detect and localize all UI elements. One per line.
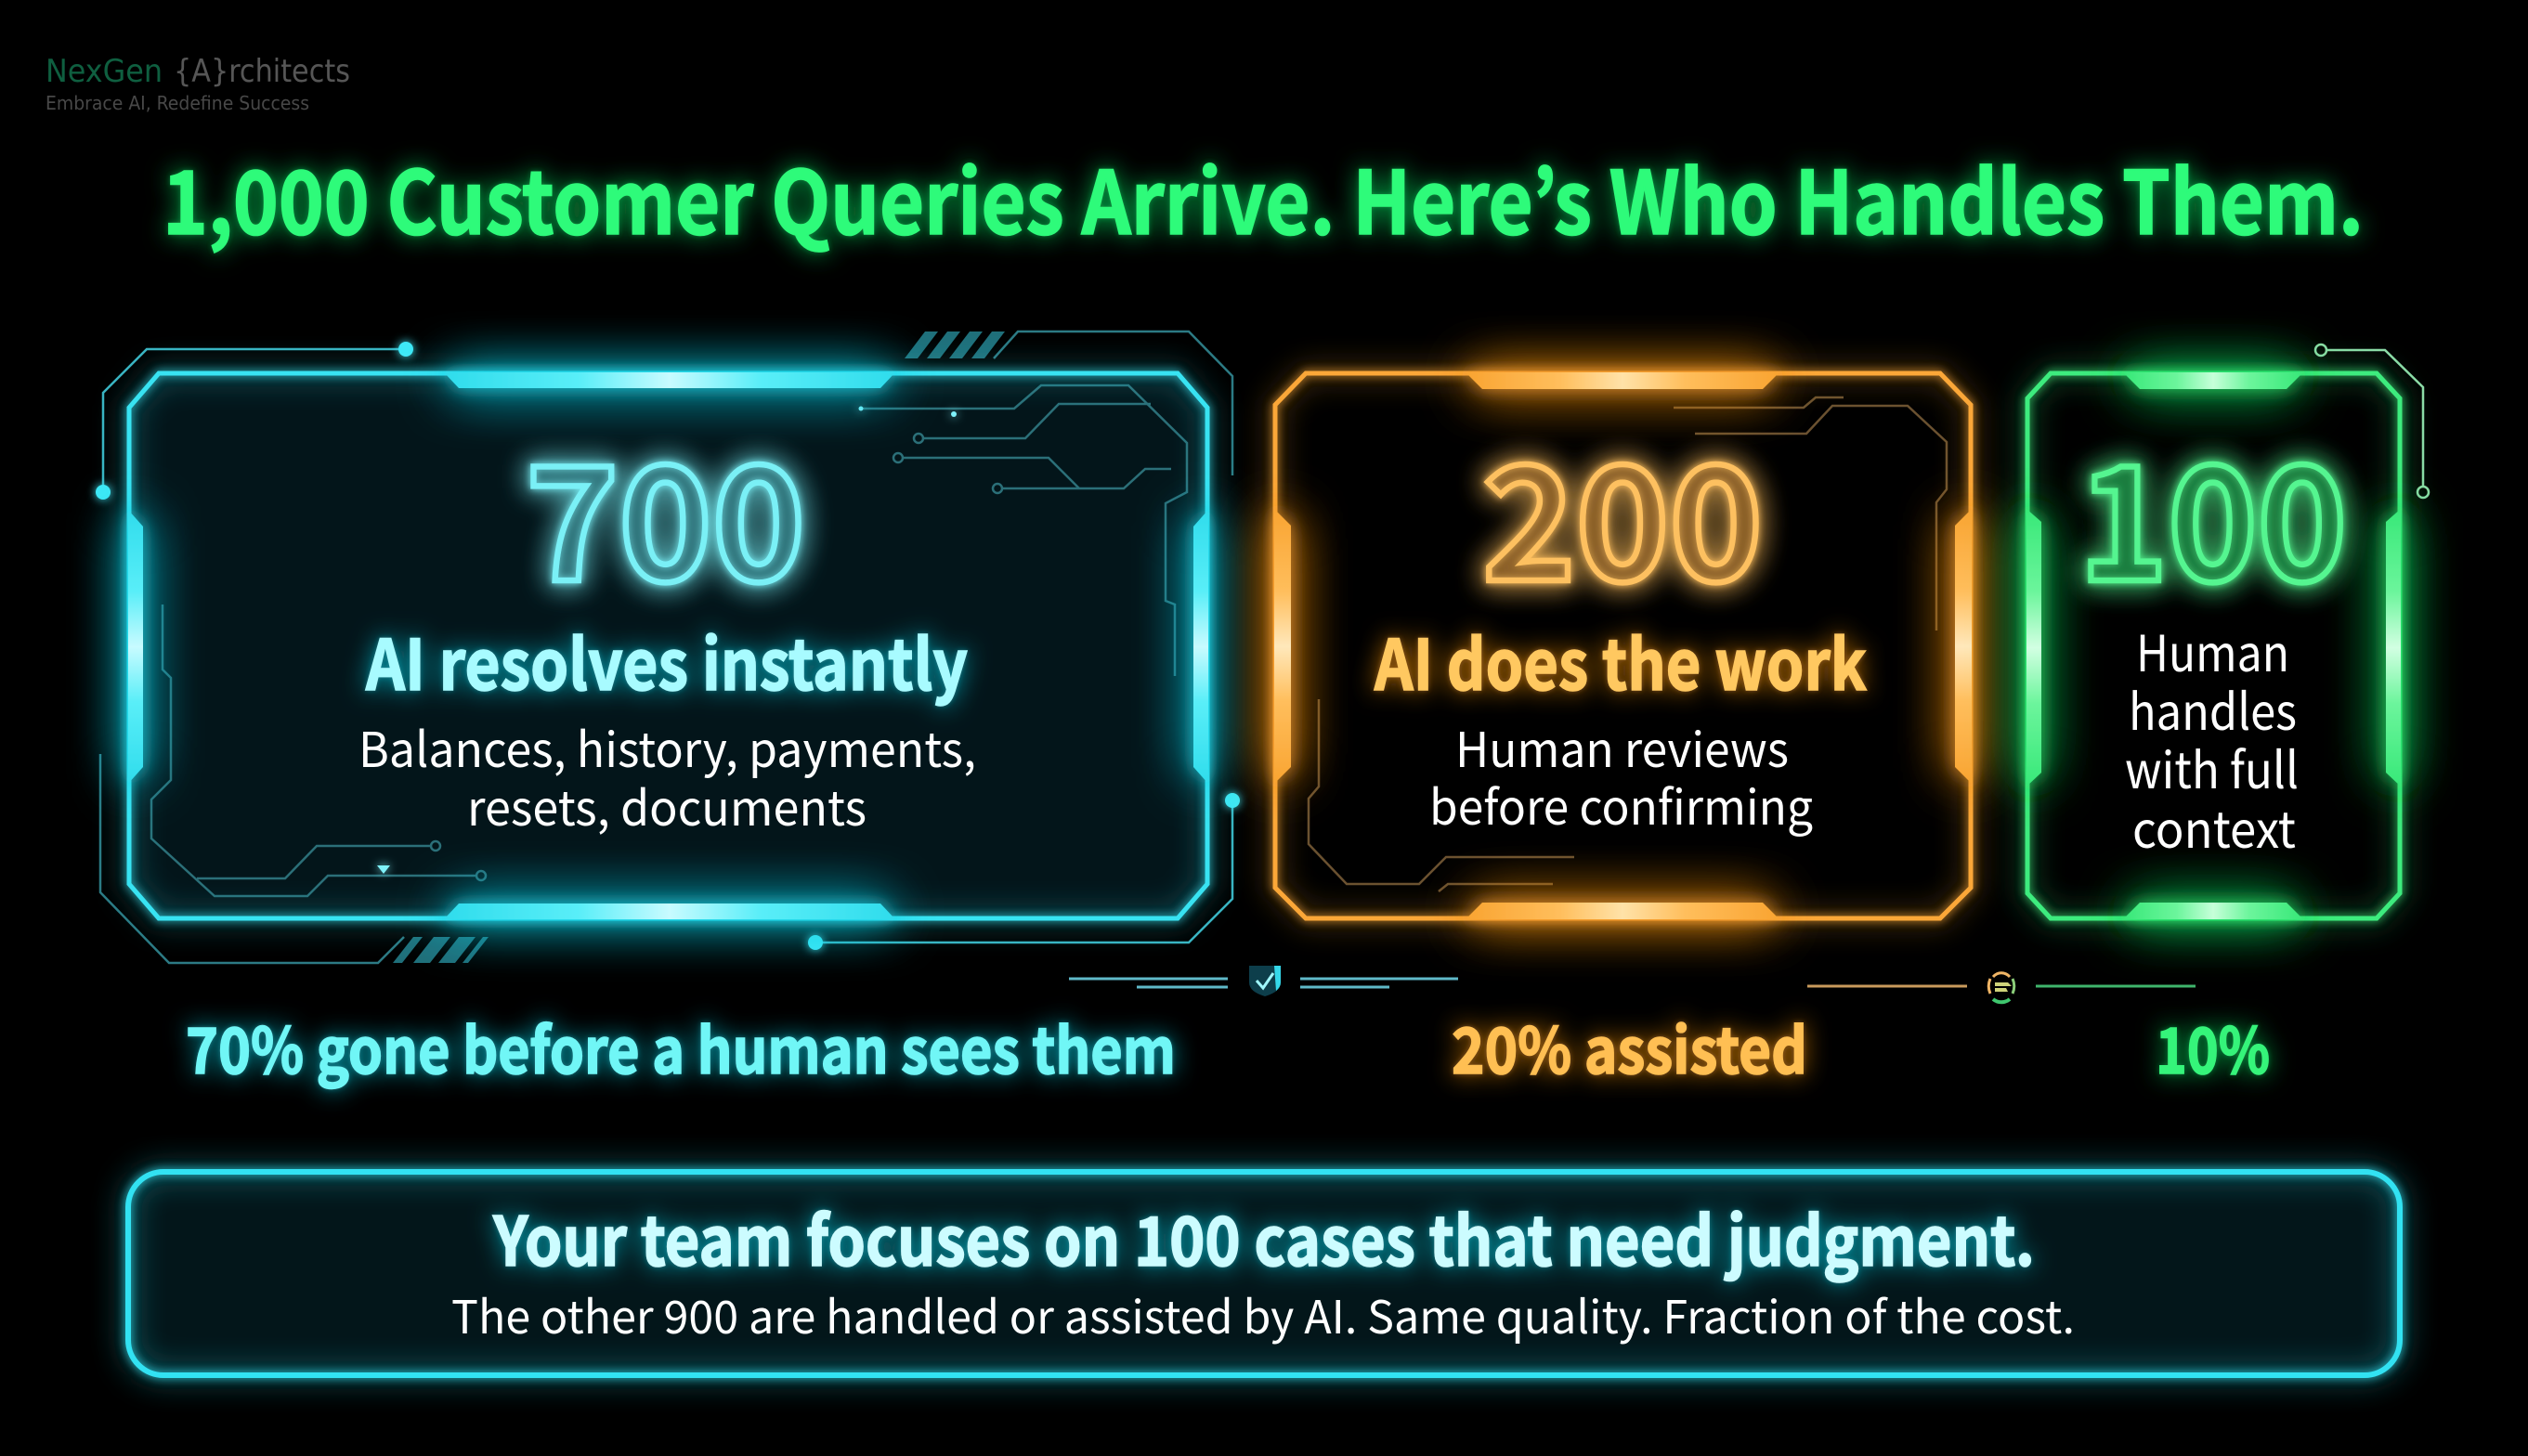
description: Human [2136,613,2289,686]
icon: shield check [1249,966,1281,996]
description: Balances, history, payments, [358,711,976,781]
logo: Embrace AI, Redefine Success [46,92,309,114]
circuit stripes [393,332,1005,963]
connector: shield divider [1069,966,1458,996]
stat: 70%: 70% gone before a human sees them [186,1000,1176,1092]
glowing connector dots [96,342,1240,950]
banner fill [128,1172,2400,1375]
description: with full [2125,730,2299,803]
description: Human reviews [1455,711,1789,781]
description: resets, documents [467,770,867,839]
frame [1275,373,1971,918]
circuit traces [1309,397,1947,891]
description [358,711,976,839]
logo [46,53,350,114]
heading: AI does the work [1374,609,1867,710]
stat: 20%: 20% assisted [1452,1000,1807,1092]
logo: {A}rchitects [174,53,350,90]
stat: 10%: 10% [2156,1000,2270,1092]
banner heading: Your team focuses on 100 cases that need judgment. [492,1188,2035,1286]
frame [129,373,1207,918]
description: before confirming [1429,769,1813,838]
frame [2027,373,2400,918]
divider line orange [1807,984,1967,988]
connector: exchange divider [1807,973,2196,1002]
panel fill [129,373,1207,918]
banner border [128,1172,2400,1375]
panel: 700 AI resolves instantly [96,332,1240,963]
glowing frame bars [2026,372,2401,919]
divider lines [1069,979,1458,987]
divider line green [2036,984,2196,988]
number 100: 100 [2078,397,2347,626]
sparks [377,407,957,874]
circuit trace [2315,344,2429,498]
description: handles [2129,671,2297,745]
panel: 100 human handles [2026,344,2429,919]
heading: AI resolves instantly [365,609,968,710]
panel: 200 AI does the work [1274,372,1972,919]
logo: NexGen [46,53,163,90]
description [2125,613,2299,863]
outer circuit lines [100,332,1232,963]
icon: exchange [1988,973,2014,1002]
glowing frame bars [1274,372,1972,919]
glowing frame bars [128,372,1208,919]
number 700: 700 [526,397,805,626]
description: context [2132,789,2296,863]
number 200: 200 [1482,397,1763,626]
description [1429,711,1813,838]
banner subtext: The other 900 are handled or assisted by AI. Same quality. Fraction of the cost. [451,1281,2075,1347]
callout banner [128,1172,2400,1375]
inner circuit traces [151,385,1187,896]
